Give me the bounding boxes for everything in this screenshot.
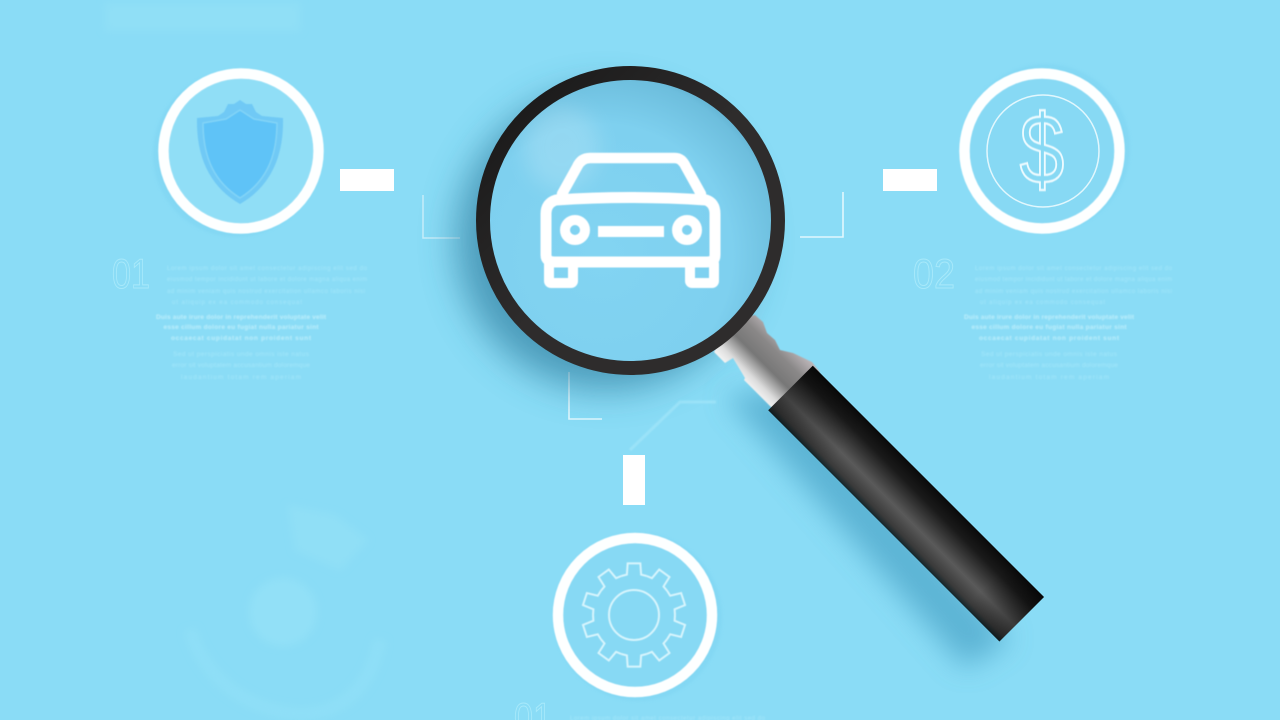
icon: gear badge xyxy=(554,533,722,701)
paragraph: upper faint lines: ut aliquip ex ea commodo consequat xyxy=(172,300,302,306)
icon: car front xyxy=(546,158,715,283)
car body xyxy=(546,198,715,262)
paragraph: centered faint lines: error sit voluptatem accusantium doloremque xyxy=(172,362,310,369)
dash: left xyxy=(340,169,394,191)
text block: item 03 cropped at the bottom xyxy=(514,694,766,720)
icon: dollar sign: $ xyxy=(1020,94,1064,204)
magnifying glass xyxy=(456,73,1044,668)
car left headlight xyxy=(565,220,585,240)
number 01: 01 xyxy=(112,250,150,297)
connector: bottom bracket xyxy=(569,372,602,419)
car grille xyxy=(598,226,664,237)
connector: faint diagonal trace over shadow xyxy=(630,402,716,450)
paragraph: upper faint lines: Lorem ipsum dolor sit amet consectetur adipiscing elit sed do xyxy=(167,266,368,272)
paragraph: centered faint lines: error sit voluptatem accusantium doloremque xyxy=(980,362,1118,369)
lens glass xyxy=(484,74,778,368)
paragraph: centered strong lines xyxy=(156,314,327,342)
car roof and windshield xyxy=(562,158,701,194)
car right headlight xyxy=(677,220,697,240)
paragraph: upper faint lines: ad minim veniam quis nostrud exercitation ullamco laboris nisi xyxy=(167,289,365,295)
paragraph: centered strong lines: Duis aute irure dolor in reprehenderit voluptate velit xyxy=(156,314,327,321)
paragraph: upper faint lines: Lorem ipsum dolor sit amet consectetur adipiscing elit sed do xyxy=(975,266,1173,272)
decorative background glows xyxy=(105,3,380,714)
connector: right bracket xyxy=(800,192,843,237)
paragraph: upper faint lines: ut aliquip ex ea commodo consequat xyxy=(980,300,1105,306)
paragraph: centered faint lines xyxy=(980,351,1118,381)
car left wheel xyxy=(549,262,573,283)
car right wheel xyxy=(690,262,714,283)
lens rim xyxy=(483,73,778,368)
lens highlight xyxy=(524,106,600,190)
paragraph: upper faint lines: eiusmod tempor incididunt ut labore et dolore magna aliqua enim xyxy=(975,277,1172,283)
paragraph: centered faint lines: Sed ut perspiciatis unde omnis iste natus xyxy=(173,351,310,358)
paragraph: centered faint lines: Sed ut perspiciatis unde omnis iste natus xyxy=(981,351,1118,358)
number 02: 02 xyxy=(913,250,955,297)
paragraph: upper faint lines xyxy=(975,266,1173,306)
paragraph: upper faint lines: ad minim veniam quis nostrud exercitation ullamco laboris nisi xyxy=(975,289,1172,295)
paragraph: centered faint lines xyxy=(172,351,310,381)
connector: left bracket xyxy=(423,195,460,238)
paragraph: upper faint lines xyxy=(167,266,368,306)
text block: item 02 xyxy=(913,250,1173,381)
paragraph: centered strong lines: occaecat cupidatat non proident sunt xyxy=(979,335,1120,342)
shadow: handle xyxy=(725,390,1010,668)
icon: dollar badge xyxy=(962,64,1130,232)
handle grip xyxy=(768,366,1044,641)
text block: item 01 xyxy=(112,250,368,381)
paragraph: upper faint lines: eiusmod tempor incididunt ut labore et dolore magna aliqua enim xyxy=(167,277,367,283)
dash: right xyxy=(883,169,937,191)
handle collar xyxy=(714,315,820,408)
paragraph: centered strong lines: occaecat cupidatat non proident sunt xyxy=(171,335,312,342)
icon: shield xyxy=(197,100,283,204)
dash: bottom xyxy=(623,455,645,505)
icon: shield badge xyxy=(153,71,319,237)
paragraph: centered faint lines: laudantium totam rem aperiam xyxy=(989,374,1109,381)
paragraph: centered strong lines: Duis aute irure dolor in reprehenderit voluptate velit xyxy=(964,314,1135,321)
paragraph: centered strong lines: esse cillum dolore eu fugiat nulla pariatur sint xyxy=(972,324,1127,331)
paragraph: centered faint lines: laudantium totam rem aperiam xyxy=(181,374,301,381)
paragraph: centered strong lines: esse cillum dolore eu fugiat nulla pariatur sint xyxy=(164,324,319,331)
shadow: lens xyxy=(456,90,756,390)
paragraph: centered strong lines xyxy=(964,314,1135,342)
icon: gear xyxy=(581,563,687,667)
